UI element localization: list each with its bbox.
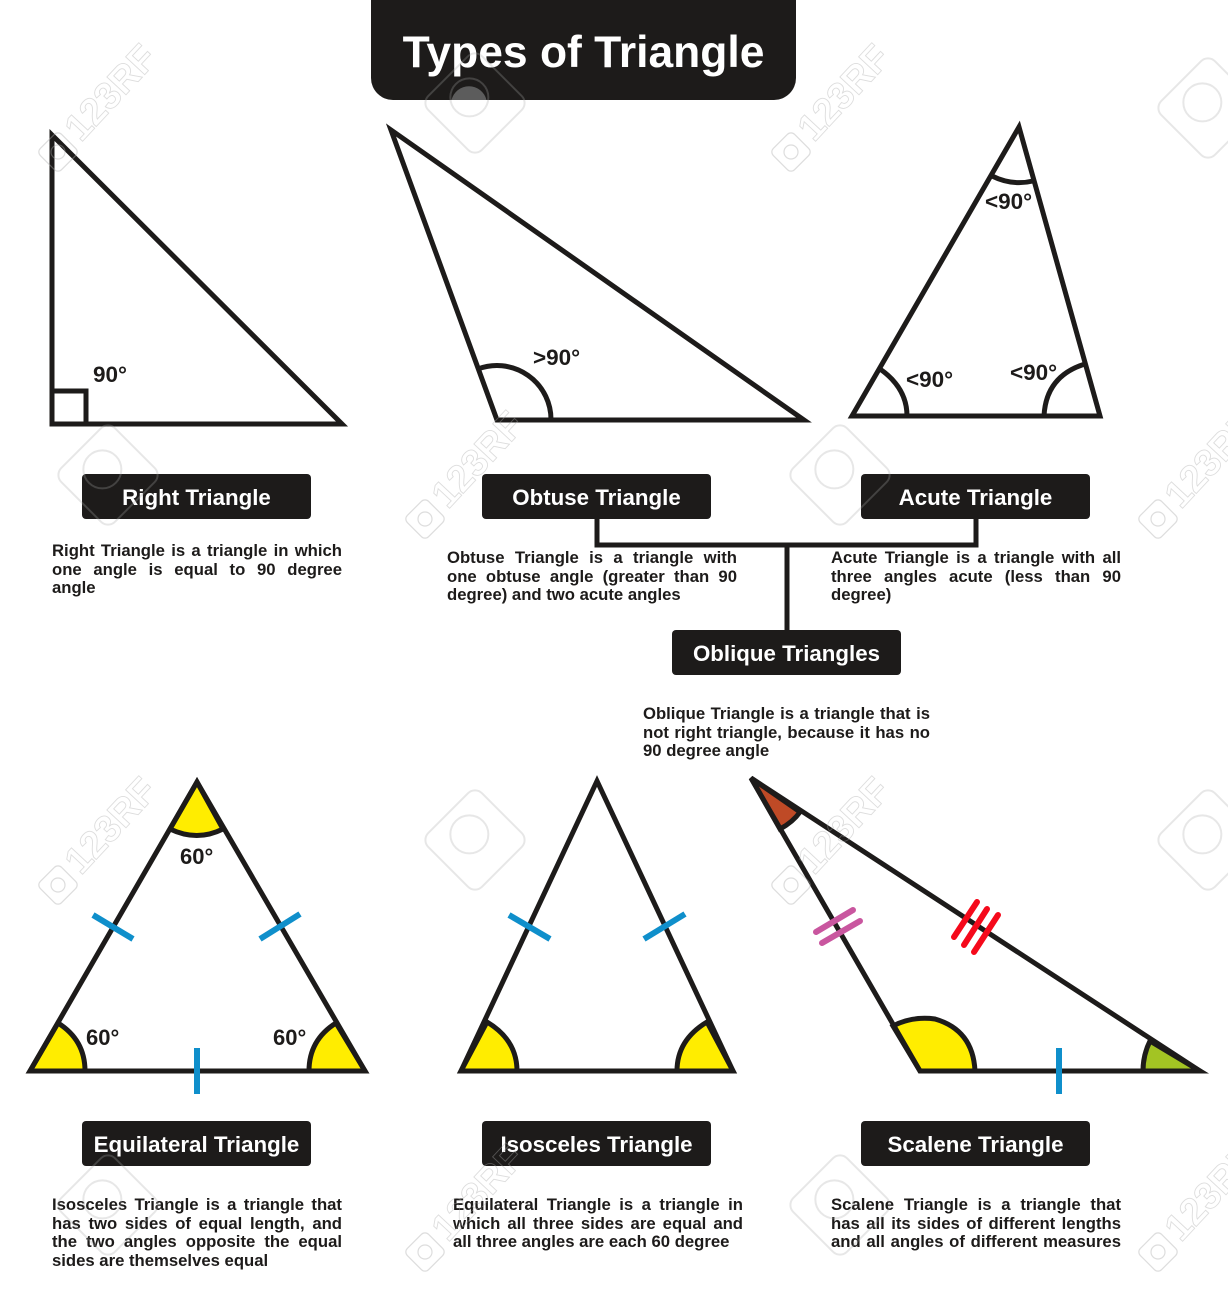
label: obtuse triangle: Obtuse Triangle bbox=[512, 485, 681, 510]
obtuse triangle diagram: >90° bbox=[533, 345, 580, 370]
text: right triangle description bbox=[52, 541, 342, 597]
acute triangle diagram bbox=[852, 127, 1100, 416]
text: equilateral column description: Isosceles Triangle is a triangle that bbox=[52, 1195, 342, 1214]
text: acute triangle description: degree) bbox=[831, 585, 891, 604]
scalene triangle diagram bbox=[751, 778, 1200, 1094]
title banner bbox=[371, 0, 796, 100]
connector between obtuse, acute and oblique labels bbox=[597, 519, 976, 632]
text: right triangle description: angle bbox=[52, 578, 96, 597]
text: isosceles column description: all three angles are each 60 degree bbox=[453, 1232, 729, 1251]
label: right triangle: Right Triangle bbox=[122, 485, 271, 510]
acute triangle diagram: <90° bbox=[985, 189, 1032, 214]
text: acute triangle description bbox=[831, 548, 1121, 604]
equilateral triangle diagram bbox=[30, 782, 365, 1094]
text: equilateral column description: the two angles opposite the equal bbox=[52, 1232, 342, 1251]
text: obtuse triangle description bbox=[447, 548, 737, 604]
text: scalene triangle description: has all its sides of different lengths bbox=[831, 1214, 1121, 1233]
acute triangle diagram: <90° bbox=[906, 367, 953, 392]
title banner: Types of Triangle bbox=[403, 28, 764, 77]
text: isosceles column description: which all three sides are equal and bbox=[453, 1214, 743, 1233]
isosceles triangle diagram bbox=[461, 781, 733, 1071]
label: equilateral triangle bbox=[82, 1121, 311, 1166]
text: equilateral column description: has two sides of equal length, and bbox=[52, 1214, 342, 1233]
text: scalene triangle description: and all angles of different measures bbox=[831, 1232, 1121, 1251]
text: oblique triangle description: Oblique Triangle is a triangle that is bbox=[643, 704, 930, 723]
text: oblique triangle description: 90 degree angle bbox=[643, 741, 769, 760]
label: right triangle bbox=[82, 474, 311, 519]
label: acute triangle: Acute Triangle bbox=[899, 485, 1052, 510]
watermark overlay: 123RF bbox=[790, 770, 898, 882]
acute triangle diagram: <90° bbox=[1010, 360, 1057, 385]
text: isosceles column description bbox=[453, 1195, 743, 1251]
label: equilateral triangle: Equilateral Triangle bbox=[94, 1132, 299, 1157]
label: isosceles triangle: Isosceles Triangle bbox=[500, 1132, 693, 1157]
equilateral triangle diagram: 60° bbox=[180, 844, 213, 869]
text: obtuse triangle description: Obtuse Triangle is a triangle with bbox=[447, 548, 737, 567]
text: oblique triangle description: not right triangle, because it has no bbox=[643, 723, 930, 742]
equilateral triangle diagram: 60° bbox=[86, 1025, 119, 1050]
text: acute triangle description: Acute Triangle is a triangle with all bbox=[831, 548, 1121, 567]
label: oblique triangles: Oblique Triangles bbox=[693, 641, 880, 666]
watermark overlay: 123RF bbox=[790, 37, 898, 149]
right triangle diagram: 90° bbox=[93, 362, 127, 387]
watermark overlay: 123RF bbox=[424, 404, 532, 516]
text: oblique triangle description bbox=[643, 704, 930, 760]
right triangle diagram bbox=[52, 135, 342, 424]
watermark overlay: 123RF bbox=[424, 1137, 532, 1249]
label: acute triangle bbox=[861, 474, 1090, 519]
text: obtuse triangle description: degree) and two acute angles bbox=[447, 585, 681, 604]
watermark overlay: 123RF bbox=[57, 770, 165, 882]
text: equilateral column description bbox=[52, 1195, 342, 1270]
label: oblique triangles bbox=[672, 630, 901, 675]
text: scalene triangle description: Scalene Triangle is a triangle that bbox=[831, 1195, 1121, 1214]
obtuse triangle diagram bbox=[391, 130, 804, 420]
label: isosceles triangle bbox=[482, 1121, 711, 1166]
text: isosceles column description: Equilateral Triangle is a triangle in bbox=[453, 1195, 743, 1214]
label: scalene triangle bbox=[861, 1121, 1090, 1166]
text: equilateral column description: sides are themselves equal bbox=[52, 1251, 268, 1270]
label: scalene triangle: Scalene Triangle bbox=[888, 1132, 1063, 1157]
watermark overlay: 123RF bbox=[57, 37, 165, 149]
text: right triangle description: Right Triangle is a triangle in which bbox=[52, 541, 342, 560]
equilateral triangle diagram: 60° bbox=[273, 1025, 306, 1050]
text: scalene triangle description bbox=[831, 1195, 1121, 1251]
label: obtuse triangle bbox=[482, 474, 711, 519]
text: obtuse triangle description: one obtuse angle (greater than 90 bbox=[447, 567, 737, 586]
text: acute triangle description: three angles acute (less than 90 bbox=[831, 567, 1121, 586]
text: right triangle description: one angle is equal to 90 degree bbox=[52, 560, 342, 579]
